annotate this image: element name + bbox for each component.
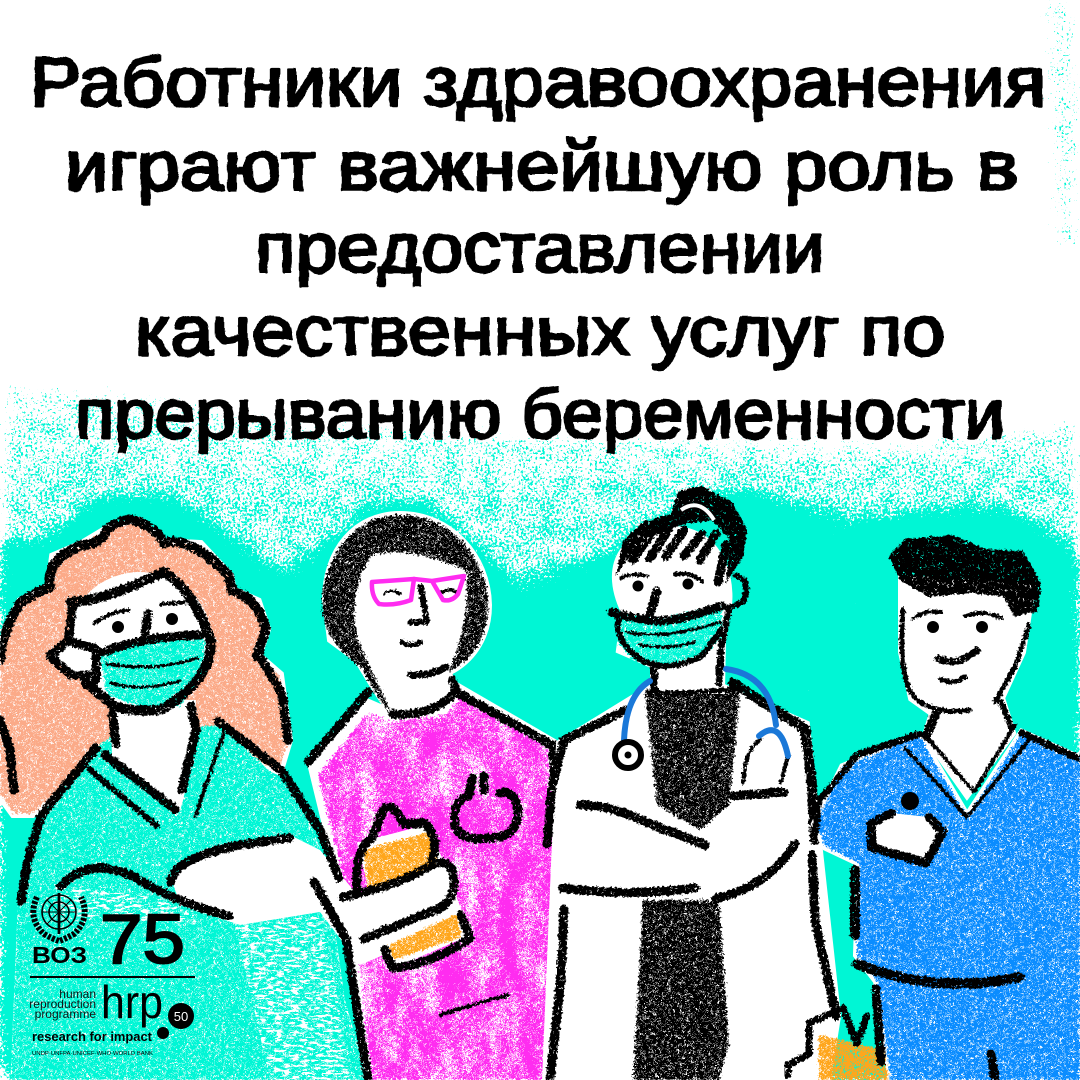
- logo text: human reproduction programme: [29, 987, 96, 1021]
- title: предоставлении: [255, 209, 825, 287]
- icon: hrp dot: [157, 1027, 169, 1039]
- crossed arms: [562, 790, 795, 900]
- logo text: human reproduction programme: programme: [35, 1007, 96, 1021]
- mask: [100, 638, 206, 708]
- title: играют важнейшую роль в: [65, 127, 1018, 205]
- figure: health worker with pink glasses and magenta top: [308, 514, 558, 1080]
- figure: male nurse in blue scrubs: [788, 537, 1080, 1080]
- logo text: 75: 75: [100, 900, 185, 978]
- icon: pink glasses: [372, 576, 464, 604]
- title: прерыванию беременности: [75, 375, 1005, 453]
- hand and bag: [819, 1035, 888, 1080]
- figure: nurse with peach hair and teal mask: [0, 520, 471, 1080]
- title: [30, 43, 1046, 453]
- badge: 50: 50: [174, 1009, 188, 1024]
- chalk specks on the lower body: [55, 885, 350, 1080]
- logo text: hrp: hrp: [101, 976, 163, 1028]
- white arm: [172, 835, 456, 965]
- logo text: human reproduction programme: human: [59, 987, 96, 1001]
- shirt: [633, 690, 740, 1080]
- logo text: WHO in Russian: ВОЗ: [32, 942, 87, 968]
- title: качественных услуг по: [135, 292, 945, 370]
- pocket: [871, 813, 943, 863]
- clipboard: [343, 807, 471, 970]
- hair: [616, 486, 747, 583]
- logo text: human reproduction programme: reproduction: [29, 997, 96, 1011]
- icon: stethoscope: [615, 669, 788, 768]
- badge: 50: [168, 1003, 194, 1029]
- icon: WHO emblem: [33, 893, 85, 941]
- figure: doctor with stethoscope and white coat: [547, 486, 836, 1080]
- logo text: sponsors: UNDP·UNFPA·UNICEF·WHO·WORLD BANK: [32, 1051, 154, 1057]
- title: Работники здравоохранения: [30, 43, 1046, 121]
- hair: [891, 537, 1039, 614]
- logo text: research for impact: research for impact: [32, 1030, 153, 1044]
- logo block: WHO 75 and HRP 50: [29, 893, 195, 1057]
- divider rule: [30, 976, 195, 978]
- hair: [0, 522, 288, 813]
